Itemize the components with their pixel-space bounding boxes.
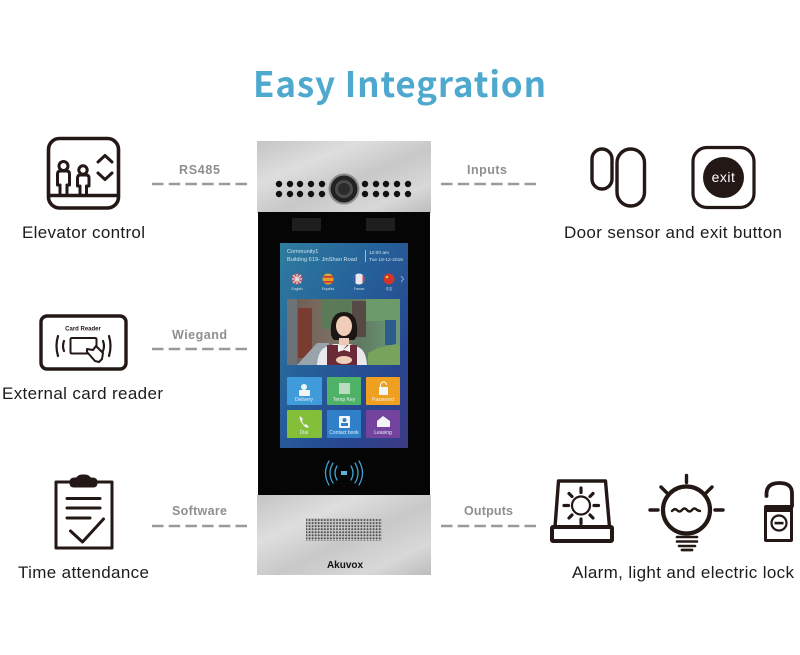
app buttons: Temp Key: [333, 397, 356, 403]
connector: Inputs: Inputs: [467, 163, 507, 177]
app buttons: Password: [372, 397, 394, 403]
touch screen: [280, 243, 408, 448]
connector: Outputs: Outputs: [464, 504, 513, 518]
language flags: 中文: [386, 286, 393, 291]
connector: Wiegand: [152, 328, 248, 349]
icon: card reader: Card Reader: [65, 326, 102, 332]
icon: clipboard: [56, 476, 112, 548]
connector: RS485: [152, 163, 248, 184]
app buttons: [287, 377, 400, 438]
icon: light bulb: [650, 476, 723, 550]
screen header text: Building 619- JinShan Road: [287, 257, 357, 263]
connector: Outputs: [441, 504, 536, 526]
device black body: [258, 212, 430, 495]
screen header text: Community1: [287, 249, 318, 255]
video call picture: [287, 299, 400, 365]
caption: elevator control: Elevator control: [22, 223, 145, 242]
screen header text: Tue 18-12-2018: [369, 257, 403, 263]
icon: alarm: [552, 481, 612, 541]
device top plate: [257, 141, 431, 213]
sensor windows: [292, 218, 395, 231]
device bottom plate: [257, 495, 431, 575]
icon: door hanger lock: [764, 483, 793, 542]
title: Easy Integration: [253, 57, 546, 108]
icon: exit button: exit: [712, 169, 735, 185]
icon: exit button: [693, 148, 754, 208]
language flags: [291, 274, 404, 291]
icon: card reader: [41, 316, 126, 369]
woman in uniform: [317, 344, 367, 365]
icon: door sensor: [592, 149, 644, 206]
screen header text: [287, 249, 403, 263]
app buttons: Contact book: [329, 430, 359, 436]
language flags: Español: [322, 287, 334, 291]
icon: elevator: [48, 138, 118, 208]
caption: door sensor and exit button: Door sensor and exit button: [564, 223, 782, 242]
brand logo: Akuvox: [327, 560, 363, 571]
app buttons: Delivery: [295, 397, 314, 403]
app buttons: Dial: [300, 430, 308, 436]
connector: RS485: RS485: [179, 163, 220, 177]
device: door intercom: [257, 141, 431, 575]
language flags: France: [354, 287, 364, 291]
connector: Inputs: [441, 163, 536, 184]
app buttons: Leasing: [374, 430, 392, 436]
speaker grille: [306, 518, 382, 541]
screen header text: 12:00 am: [369, 250, 389, 256]
caption: external card reader: External card reader: [2, 384, 163, 403]
card reader symbol: [326, 461, 362, 485]
connector: Software: Software: [172, 504, 227, 518]
caption: alarm, light and electric lock: Alarm, light and electric lock: [572, 563, 794, 582]
connector: Software: [152, 504, 248, 526]
connector: Wiegand: Wiegand: [172, 328, 227, 342]
camera and speaker holes: [276, 174, 411, 204]
language flags: English: [291, 287, 303, 291]
caption: time attendance: Time attendance: [18, 563, 149, 582]
